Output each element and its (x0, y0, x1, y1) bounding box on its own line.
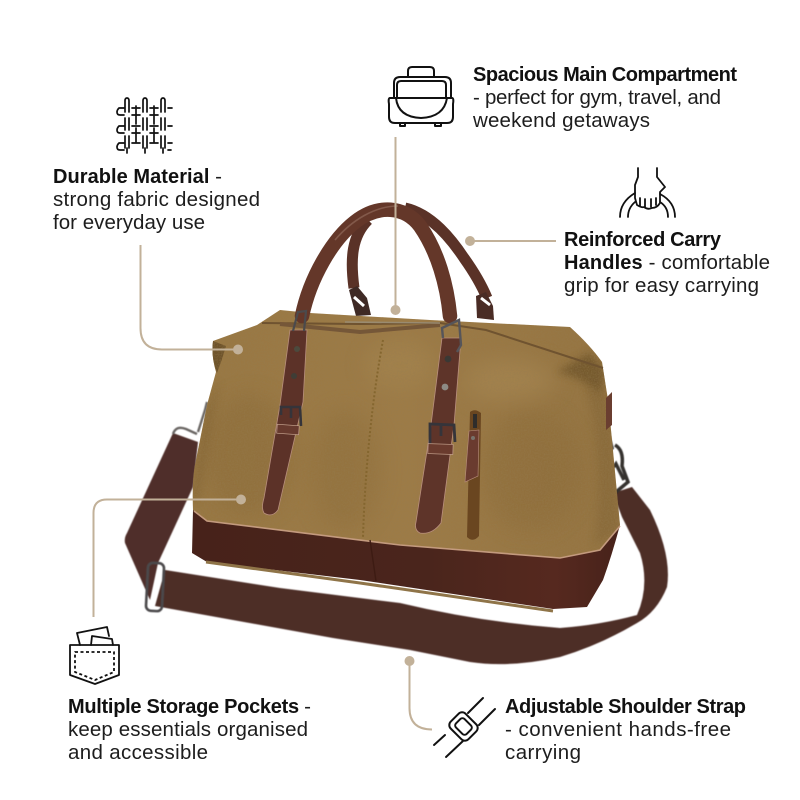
back handle grip (352, 208, 487, 298)
bag body (190, 305, 625, 611)
text: reinforced carry handles (564, 229, 770, 297)
right leather strap (416, 320, 461, 533)
icon: hand gripping handles (620, 168, 675, 217)
strap ring (442, 320, 461, 352)
text: spacious main compartment: weekend getaways (472, 109, 650, 132)
strap band (416, 338, 461, 533)
strap band (262, 330, 307, 515)
zip tab rivet (471, 436, 475, 440)
zip slot (467, 410, 481, 540)
text: multiple storage pockets: and accessible (68, 741, 208, 764)
strap buckle (281, 407, 301, 426)
text: adjustable shoulder strap (505, 696, 746, 764)
callout: durable material connector (140, 245, 243, 354)
strap keeper (277, 424, 299, 435)
shoulder strap (125, 402, 668, 664)
strap: left hook (173, 402, 207, 434)
text: spacious main compartment: Spacious Main Compartment (473, 64, 737, 86)
callout: shoulder strap connector (404, 656, 432, 730)
side tab (606, 392, 612, 430)
text: durable material (53, 165, 260, 234)
icon: strap buckle (434, 698, 495, 757)
strap: metal slider (146, 563, 164, 611)
back handle left ring (349, 286, 371, 316)
strap buckle (430, 424, 455, 445)
icon: briefcase bag (389, 67, 453, 126)
back handle right ring (476, 292, 494, 320)
top zip band (262, 323, 603, 368)
text: durable material: for everyday use (53, 211, 205, 234)
leather base (192, 510, 620, 609)
handle highlight (335, 206, 398, 240)
base stitching edge (194, 511, 620, 558)
canvas bottom lip (206, 562, 553, 611)
callout: storage pockets connector (94, 494, 246, 617)
strap keeper (428, 444, 453, 454)
text: spacious main compartment (472, 64, 737, 132)
text: adjustable shoulder strap: - convenient hands-free (505, 718, 731, 741)
text: reinforced carry handles: grip for easy carrying (564, 274, 759, 297)
zip pull strip (345, 322, 440, 323)
handle grip (302, 210, 450, 316)
icon: woven fabric (117, 98, 172, 153)
text: durable material: strong fabric designed (53, 188, 260, 211)
strap: right swivel hook (606, 430, 628, 492)
base seam (370, 540, 376, 581)
strap: rear left section (125, 433, 198, 600)
back handle (349, 208, 494, 320)
text: multiple storage pockets (68, 695, 311, 764)
text: reinforced carry handles: Handles - comfortable (564, 251, 770, 274)
canvas panel (193, 310, 620, 558)
zip pull hardware (473, 414, 477, 428)
text: reinforced carry handles: Reinforced Carry (564, 229, 722, 251)
front zip pocket (465, 410, 481, 540)
text: multiple storage pockets: keep essentials organised (68, 718, 308, 741)
front handle (302, 206, 450, 316)
callout: carry handles connector (465, 236, 556, 246)
strap ring (293, 311, 306, 331)
callout: main compartment connector (390, 137, 400, 315)
strap rivets (291, 346, 300, 379)
text: adjustable shoulder strap: Adjustable Shoulder Strap (505, 696, 746, 718)
top flap band (280, 324, 440, 332)
strap rivets (442, 356, 451, 390)
left leather strap (262, 311, 307, 515)
text: adjustable shoulder strap: carrying (505, 741, 581, 764)
strap: long lower section (155, 487, 668, 664)
text: multiple storage pockets: Multiple Storage Pockets - (68, 695, 311, 718)
canvas shading (192, 310, 620, 536)
zip leather tab (465, 430, 479, 482)
text: durable material: Durable Material - (53, 165, 222, 188)
text: spacious main compartment: - perfect for gym, travel, and (473, 86, 721, 109)
icon: pocket with cards (70, 627, 119, 684)
centre seam (363, 340, 383, 537)
